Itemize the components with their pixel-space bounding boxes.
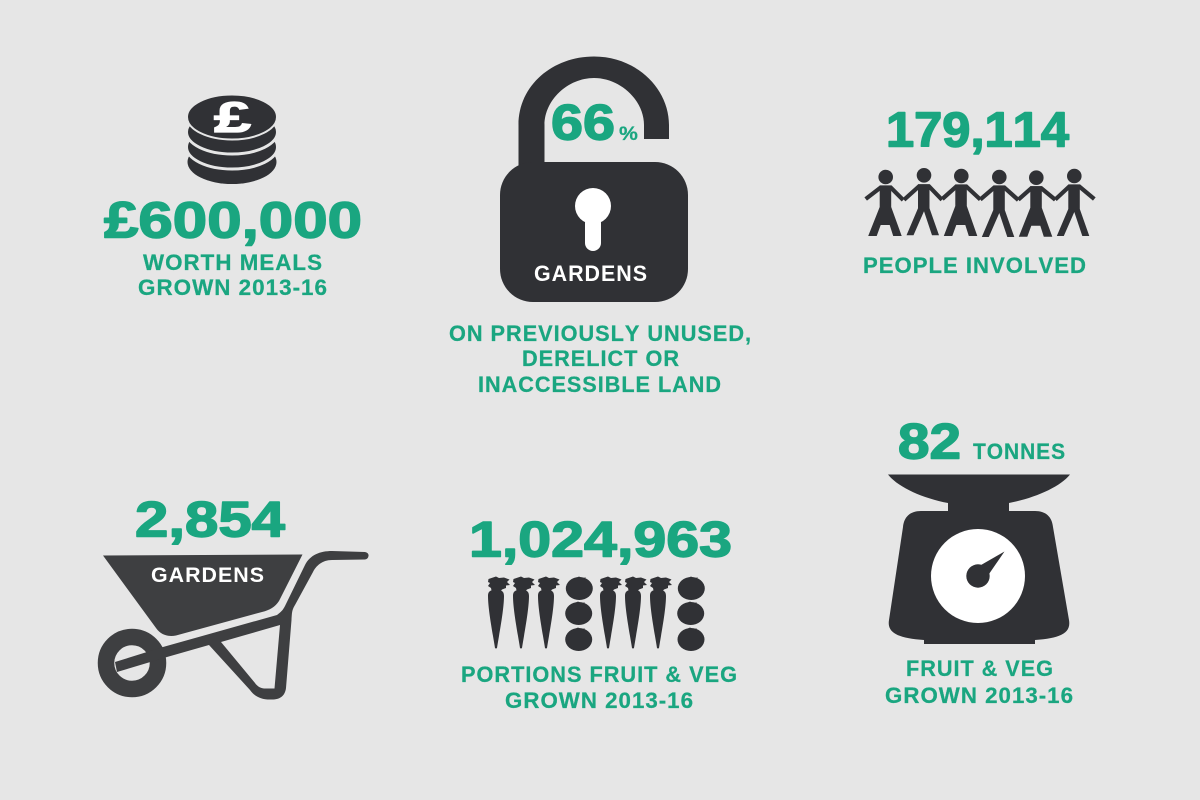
icon: kitchen scales — [888, 474, 1070, 644]
icon: wheelbarrow — [103, 551, 369, 700]
figure: 1,024,963: 1,024,963 — [469, 512, 732, 568]
label: on previously unused land: DERELICT OR — [522, 346, 680, 371]
label: people involved: PEOPLE INVOLVED — [863, 253, 1087, 278]
label: fruit and veg grown: FRUIT & VEG — [906, 656, 1054, 681]
label: portions fruit and veg grown: PORTIONS FRUIT & VEG — [461, 662, 738, 687]
label: worth meals grown: WORTH MEALS — [143, 250, 323, 275]
label: worth meals grown: GROWN 2013-16 — [138, 275, 328, 300]
figure: 82 tonnes: 82 — [898, 414, 961, 470]
figure: 82 tonnes — [898, 414, 1066, 470]
icon: open padlock: GARDENS — [534, 261, 648, 286]
label: on previously unused land: ON PREVIOUSLY UNUSED, — [449, 321, 752, 346]
label: portions fruit and veg grown: GROWN 2013-16 — [505, 688, 694, 713]
label: worth meals grown — [138, 250, 328, 300]
panel: number of gardens — [103, 492, 369, 700]
figure: 66% — [551, 94, 639, 150]
label: on previously unused land: INACCESSIBLE LAND — [478, 372, 722, 397]
panel: tonnes of fruit and veg — [885, 414, 1074, 708]
icon: stack of pound coins — [186, 94, 278, 184]
label: portions fruit and veg grown — [461, 662, 738, 713]
figure: 66%: % — [619, 124, 639, 145]
panel: people involved — [863, 104, 1094, 278]
label: fruit and veg grown — [885, 656, 1074, 708]
icon: row of people holding hands — [866, 168, 1094, 237]
icon: wheelbarrow: GARDENS — [151, 564, 265, 587]
panel: money value of meals — [104, 94, 362, 300]
panel: portions of fruit and veg — [461, 512, 738, 713]
figure: 2,854: 2,854 — [135, 492, 285, 548]
label: fruit and veg grown: GROWN 2013-16 — [885, 683, 1074, 708]
figure: 179,114: 179,114 — [886, 104, 1069, 158]
panel: gardens on unused land — [449, 56, 752, 397]
figure: 66%: 66 — [551, 94, 615, 150]
figure: £600,000: £600,000 — [104, 192, 362, 248]
icon: rows of carrots and tomatoes — [488, 576, 705, 651]
icon: open padlock — [500, 56, 688, 302]
label: on previously unused land — [449, 321, 752, 397]
figure: 82 tonnes: TONNES — [973, 439, 1066, 464]
icon: stack of pound coins: £ — [214, 94, 251, 142]
